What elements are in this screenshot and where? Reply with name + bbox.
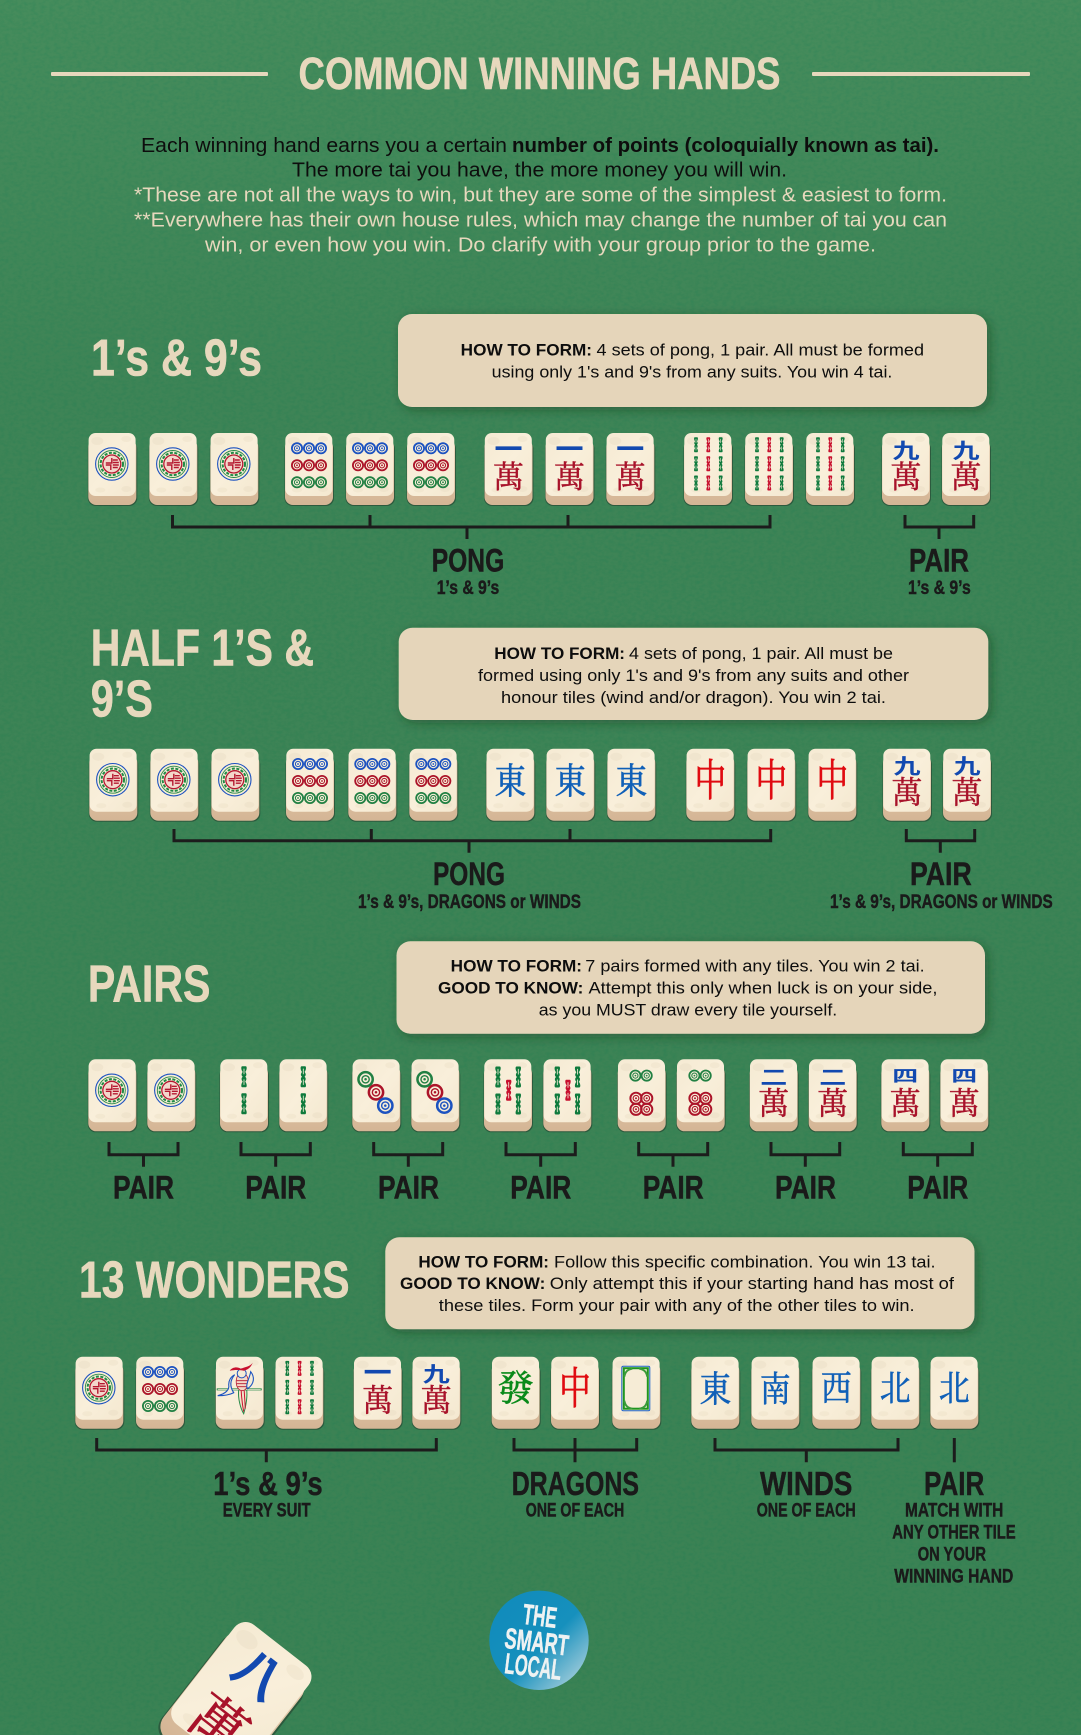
section heading: half 1's & 9's: HALF 1’S & bbox=[91, 620, 314, 678]
tile: 2 wan: 二 bbox=[760, 1066, 787, 1089]
tile: 1 wan bbox=[545, 433, 594, 506]
label: pair: PAIR bbox=[909, 543, 969, 579]
tile: 4 wan: 萬 bbox=[890, 1086, 921, 1121]
tile: north wind bbox=[871, 1357, 920, 1430]
tile: 3 circles bbox=[411, 1059, 460, 1132]
tile: east wind: 東 bbox=[699, 1370, 731, 1410]
intro text block: The more tai you have, the more money you will win. bbox=[292, 160, 787, 182]
section heading: 13 wonders: 13 WONDERS bbox=[79, 1252, 350, 1310]
tile: south wind bbox=[751, 1357, 800, 1430]
tile: 1 circle bbox=[75, 1357, 124, 1430]
tile: 9 wan: 萬 bbox=[952, 776, 982, 811]
panel: how to form, 13 wonders bbox=[385, 1237, 974, 1329]
tile: 6 circles bbox=[617, 1059, 667, 1132]
panel: how to form, 13 wonders: these tiles. Form your pair with any of the other tiles to win. bbox=[439, 1296, 915, 1315]
labels: seven pairs bbox=[113, 1169, 968, 1205]
panel: how to form, pairs: 7 pairs formed with any tiles. You win 2 tai. bbox=[585, 957, 925, 976]
title: COMMON WINNING HANDS bbox=[298, 48, 780, 99]
tile: east wind bbox=[691, 1357, 740, 1430]
tile row: 1's & 9's hand bbox=[88, 433, 991, 506]
label: 1's & 9's every suit: 1’s & 9’s bbox=[213, 1465, 323, 1502]
logo: the smart local bbox=[489, 1591, 589, 1690]
panel: how to form, 13 wonders: HOW TO FORM: bbox=[418, 1252, 549, 1271]
tile: 9 wan: 萬 bbox=[421, 1384, 452, 1419]
tile: east wind: 東 bbox=[554, 762, 586, 802]
tile: 1 wan: 一 bbox=[555, 434, 584, 465]
label: pair match with any other tile: ANY OTHER TILE bbox=[892, 1522, 1016, 1544]
section heading: pairs: PAIRS bbox=[88, 956, 210, 1014]
panel: how to form, pairs: as you MUST draw every tile yourself. bbox=[539, 1000, 837, 1019]
tile: 9 wan: 九 bbox=[893, 440, 920, 463]
bracket: winds bbox=[715, 1438, 898, 1462]
label: 1's & 9's every suit bbox=[213, 1465, 323, 1522]
tile: 9 bamboo bbox=[806, 433, 855, 506]
tile: 9 bamboo bbox=[275, 1357, 324, 1430]
decorative tile: 8 wan, rotated: 八 bbox=[221, 1640, 292, 1712]
tile: red dragon bbox=[808, 749, 857, 822]
tile: 1 circle bbox=[149, 433, 198, 506]
panel: how to form, half 1's & 9's: HOW TO FORM: bbox=[494, 644, 625, 663]
tile: 4 wan: 四 bbox=[892, 1066, 918, 1085]
label: pong: PONG bbox=[433, 856, 505, 892]
decorative tile: 8 wan, rotated bbox=[152, 1615, 320, 1735]
tile: 1 wan: 萬 bbox=[615, 460, 646, 495]
tile: 9 circles bbox=[348, 749, 397, 822]
tile: 9 wan bbox=[412, 1357, 461, 1430]
bracket: pong bbox=[172, 515, 770, 539]
bracket: pair bbox=[906, 829, 975, 853]
labels: seven pairs: PAIR bbox=[643, 1169, 704, 1205]
label: pair bbox=[830, 856, 1053, 913]
label: 1's & 9's every suit: EVERY SUIT bbox=[223, 1500, 311, 1522]
tile: red dragon bbox=[747, 749, 796, 822]
tile: 1 circle bbox=[147, 1059, 196, 1132]
tile: 2 wan: 萬 bbox=[758, 1086, 789, 1121]
tile: 9 bamboo bbox=[744, 433, 794, 506]
logo: the smart local: THE bbox=[521, 1599, 559, 1635]
tile: 2 wan: 萬 bbox=[817, 1086, 848, 1121]
tile: 9 circles bbox=[136, 1357, 185, 1430]
label: dragons one of each: DRAGONS bbox=[512, 1465, 639, 1502]
panel: how to form, 1's & 9's bbox=[398, 314, 987, 407]
tile: 1 wan: 萬 bbox=[554, 460, 585, 495]
bracket: dragons bbox=[514, 1438, 637, 1462]
panel: how to form, 1's & 9's: using only 1's and 9's from any suits. You win 4 tai. bbox=[492, 363, 892, 382]
intro text block: win, or even how you win. Do clarify with your group prior to the game. bbox=[204, 234, 876, 256]
label: pair match with any other tile: ON YOUR bbox=[918, 1544, 986, 1566]
tile: 1 wan: 萬 bbox=[493, 460, 524, 495]
label: pair match with any other tile: MATCH WITH bbox=[905, 1500, 1003, 1522]
label: pair match with any other tile: PAIR bbox=[924, 1465, 984, 1502]
brackets: seven pairs bbox=[109, 1142, 972, 1167]
tile: red dragon: 中 bbox=[559, 1366, 591, 1414]
tile: green dragon: 發 bbox=[498, 1369, 534, 1409]
tile: red dragon bbox=[686, 749, 735, 822]
label: pong bbox=[358, 856, 581, 913]
tile: 1 wan: 一 bbox=[364, 1358, 392, 1389]
tile: west wind: 西 bbox=[821, 1371, 852, 1409]
labels: seven pairs: PAIR bbox=[245, 1169, 306, 1205]
tile: 1 wan: 萬 bbox=[362, 1384, 393, 1419]
label: pair: 1’s & 9’s bbox=[908, 577, 971, 599]
tile: 1 wan bbox=[606, 433, 655, 506]
tile: east wind bbox=[546, 749, 595, 822]
tile: 1 circle bbox=[211, 749, 260, 822]
label: dragons one of each: ONE OF EACH bbox=[526, 1500, 624, 1522]
intro text block: Each winning hand earns you a certain bbox=[141, 135, 507, 157]
tile: 6 circles bbox=[676, 1059, 726, 1132]
tile: 3 circles bbox=[352, 1059, 401, 1132]
label: pair match with any other tile bbox=[892, 1465, 1016, 1588]
intro text block: number of points (coloquially known as tai). bbox=[512, 135, 939, 157]
tile: 2 bamboo bbox=[279, 1059, 328, 1132]
tile: 4 wan bbox=[881, 1059, 930, 1132]
label: pong: 1’s & 9’s, DRAGONS or WINDS bbox=[358, 891, 581, 913]
tile: 2 wan bbox=[808, 1059, 858, 1132]
tile: 2 wan: 二 bbox=[819, 1066, 846, 1089]
panel: how to form, pairs bbox=[396, 941, 985, 1034]
tile: 5 bamboo bbox=[484, 1059, 533, 1132]
tile: 9 circles bbox=[409, 749, 458, 822]
label: pong: PONG bbox=[432, 543, 504, 579]
bracket: pair bbox=[905, 515, 974, 539]
logo: the smart local: LOCAL bbox=[503, 1648, 563, 1687]
labels: seven pairs: PAIR bbox=[907, 1169, 968, 1205]
tile: 9 wan: 萬 bbox=[950, 460, 982, 495]
tile: red dragon: 中 bbox=[755, 758, 787, 806]
tile: east wind bbox=[486, 749, 535, 822]
label: dragons one of each bbox=[512, 1465, 639, 1522]
tile: 9 circles bbox=[284, 433, 334, 506]
label: pair match with any other tile: WINNING HAND bbox=[894, 1566, 1013, 1588]
panel: how to form, 13 wonders: Follow this specific combination. You win 13 tai. bbox=[554, 1252, 936, 1271]
tile: 1 wan bbox=[353, 1357, 403, 1430]
section heading: half 1's & 9's: 9’S bbox=[91, 671, 153, 729]
tile: 1 circle bbox=[88, 433, 137, 506]
tile: east wind: 東 bbox=[615, 762, 647, 802]
tile: 9 wan: 萬 bbox=[890, 460, 922, 495]
tile: 1 wan: 一 bbox=[616, 434, 644, 465]
tile: 9 circles bbox=[346, 433, 395, 506]
tile: 1 circle bbox=[210, 433, 259, 506]
tile: south wind: 南 bbox=[760, 1371, 791, 1410]
tile row: pairs hand bbox=[88, 1059, 989, 1132]
tile: 1 circle bbox=[150, 749, 199, 822]
tile: green dragon bbox=[491, 1357, 541, 1430]
tile: 9 wan: 萬 bbox=[892, 776, 922, 811]
panel: how to form, 13 wonders: Only attempt this if your starting hand has most of bbox=[550, 1274, 954, 1293]
tile: 9 circles bbox=[286, 749, 335, 822]
tile: 2 bamboo bbox=[220, 1059, 269, 1132]
intro text block: **Everywhere has their own house rules, which may change the number of tai you can bbox=[134, 210, 947, 232]
tile: 9 bamboo bbox=[684, 433, 733, 506]
bracket: 1's & 9's bbox=[97, 1438, 436, 1462]
tile: east wind: 東 bbox=[494, 762, 526, 802]
tile: 1 bamboo bird bbox=[215, 1357, 265, 1430]
panel: how to form, pairs: Attempt this only when luck is on your side, bbox=[588, 978, 938, 997]
panel: how to form, pairs: GOOD TO KNOW: bbox=[438, 978, 583, 997]
tile: 9 wan bbox=[882, 749, 932, 822]
tile: red dragon: 中 bbox=[816, 758, 848, 806]
tile: 9 wan bbox=[942, 433, 991, 506]
tile row: half 1's & 9's hand bbox=[89, 749, 992, 822]
tile: 9 wan: 九 bbox=[954, 756, 981, 779]
tile: 1 wan bbox=[484, 433, 534, 506]
panel: how to form, half 1's & 9's: honour tiles (wind and/or dragon). You win 2 tai. bbox=[501, 688, 886, 707]
tile: 4 wan: 萬 bbox=[949, 1086, 980, 1121]
tile: 9 wan bbox=[942, 749, 992, 822]
tile: 1 circle bbox=[88, 1059, 137, 1132]
label: pong: 1’s & 9’s bbox=[437, 577, 499, 599]
label: pair: PAIR bbox=[910, 856, 972, 892]
tile: north wind: 北 bbox=[880, 1371, 911, 1409]
line: pair bbox=[953, 1438, 956, 1462]
panel: how to form, 1's & 9's: 4 sets of pong, 1 pair. All must be formed bbox=[596, 341, 924, 360]
panel: how to form, half 1's & 9's: 4 sets of pong, 1 pair. All must be bbox=[629, 644, 893, 663]
label: pong bbox=[432, 543, 504, 599]
title bbox=[51, 48, 1030, 99]
section heading: half 1's & 9's bbox=[91, 620, 314, 729]
tile: 4 wan: 四 bbox=[951, 1066, 977, 1085]
intro text block bbox=[134, 135, 947, 256]
labels: seven pairs: PAIR bbox=[775, 1169, 836, 1205]
panel: how to form, half 1's & 9's: formed using only 1's and 9's from any suits and other bbox=[478, 666, 909, 685]
panel: how to form, 1's & 9's: HOW TO FORM: bbox=[461, 341, 592, 360]
label: winds one of each: ONE OF EACH bbox=[757, 1500, 856, 1522]
tile: 1 circle bbox=[89, 749, 138, 822]
labels: seven pairs: PAIR bbox=[113, 1169, 174, 1205]
labels: seven pairs: PAIR bbox=[378, 1169, 439, 1205]
logo: the smart local: SMART bbox=[503, 1623, 571, 1663]
intro text block: *These are not all the ways to win, but they are some of the simplest & easiest to form. bbox=[134, 184, 947, 206]
tile: red dragon bbox=[550, 1357, 600, 1430]
tile: 9 wan: 九 bbox=[953, 440, 980, 463]
tile: 5 bamboo bbox=[543, 1059, 592, 1132]
panel: how to form, half 1's & 9's bbox=[399, 628, 988, 720]
tile: east wind bbox=[607, 749, 656, 822]
tile: north wind: 北 bbox=[939, 1371, 970, 1409]
tile: 9 wan: 九 bbox=[423, 1364, 450, 1387]
tile: 9 circles bbox=[406, 433, 456, 506]
tile: white dragon bbox=[612, 1357, 661, 1430]
panel: how to form, pairs: HOW TO FORM: bbox=[451, 957, 582, 976]
tile: 4 wan bbox=[940, 1059, 989, 1132]
tile: north wind bbox=[930, 1357, 979, 1430]
label: winds one of each bbox=[757, 1465, 856, 1522]
tile row: 13 wonders hand bbox=[75, 1357, 979, 1430]
bracket: pong bbox=[174, 829, 771, 853]
tile: red dragon: 中 bbox=[694, 758, 726, 806]
tile: west wind bbox=[812, 1357, 861, 1430]
tile: 1 wan: 一 bbox=[494, 434, 523, 465]
labels: seven pairs: PAIR bbox=[510, 1169, 571, 1205]
tile: 2 wan bbox=[749, 1059, 799, 1132]
section heading: 1's & 9's: 1’s & 9’s bbox=[91, 330, 262, 388]
label: pair bbox=[908, 543, 971, 599]
tile: 9 wan: 九 bbox=[894, 756, 921, 779]
label: winds one of each: WINDS bbox=[760, 1465, 852, 1502]
tile: 9 wan bbox=[882, 433, 931, 506]
panel: how to form, 13 wonders: GOOD TO KNOW: bbox=[400, 1274, 545, 1293]
